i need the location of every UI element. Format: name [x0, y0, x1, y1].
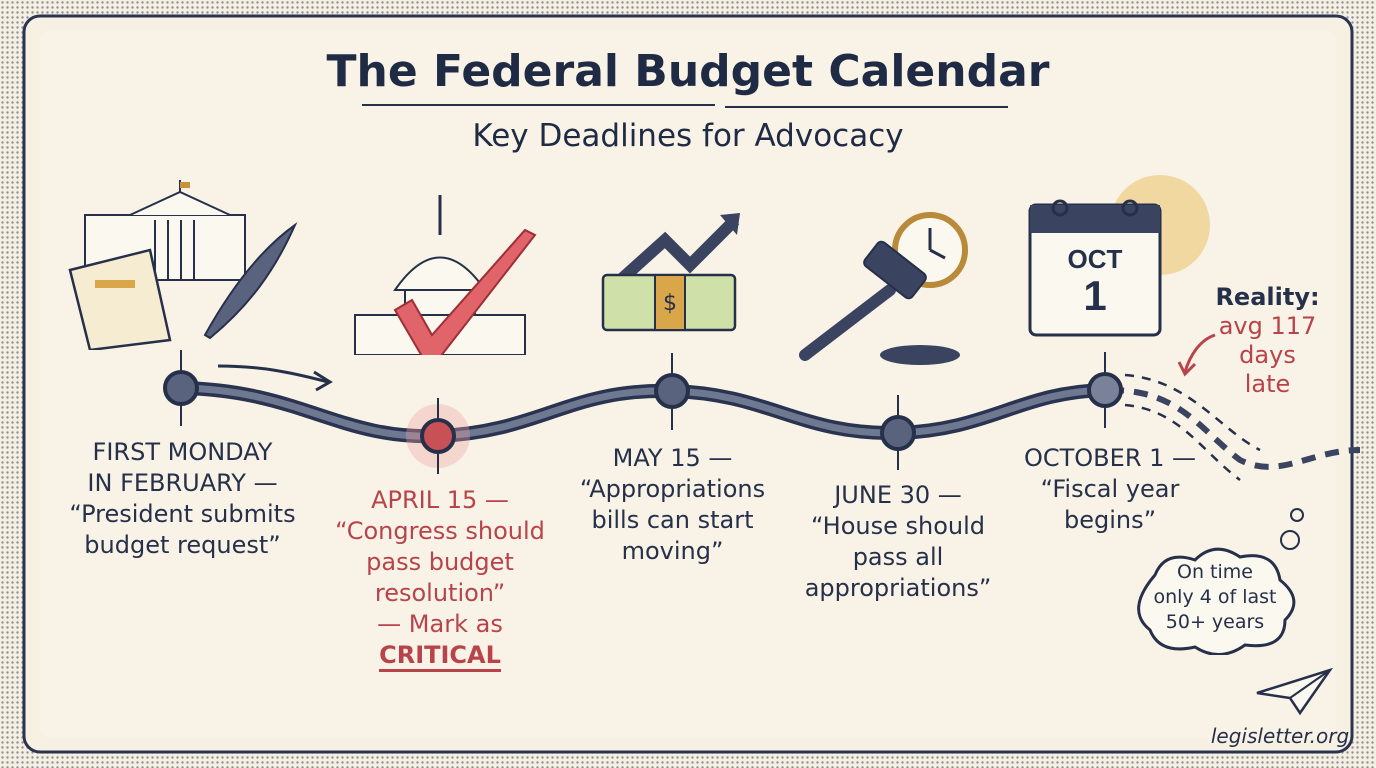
- text: october 1: [1024, 444, 1196, 534]
- text: june 30: JUNE 30 —: [834, 481, 962, 509]
- text: june 30: “House should: [811, 512, 985, 540]
- text: first monday: [69, 438, 296, 559]
- icon: calendar Oct 1 with sun: 1: [1083, 272, 1107, 319]
- icon: white house and scroll: [68, 180, 298, 350]
- text: may 15: “Appropriations: [580, 475, 765, 503]
- text: june 30: appropriations”: [805, 574, 991, 602]
- text: april 15 critical: pass budget: [366, 548, 514, 576]
- callout: cloud: only 4 of last: [1154, 586, 1276, 608]
- callout: reality: [1215, 283, 1320, 398]
- text: october 1: OCTOBER 1 —: [1024, 444, 1196, 472]
- callout: reality: late: [1245, 370, 1290, 398]
- text: first monday: budget request”: [84, 531, 281, 559]
- callout: reality: days: [1239, 341, 1296, 369]
- icon: capitol with checkmark: [354, 195, 536, 355]
- text: april 15 critical: — Mark as: [377, 610, 503, 638]
- icon: calendar Oct 1 with sun: OCT: [1068, 244, 1123, 274]
- text: june 30: pass all: [853, 543, 943, 571]
- icon: calendar Oct 1 with sun: [1028, 175, 1210, 336]
- text: first monday: IN FEBRUARY —: [87, 469, 278, 497]
- text: april 15 critical: APRIL 15 —: [371, 486, 509, 514]
- text: june 30: [805, 481, 991, 602]
- text: first monday: “President submits: [69, 500, 296, 528]
- callout: reality: Reality:: [1215, 283, 1320, 311]
- footer: url: legisletter.org: [1211, 724, 1349, 748]
- callout: reality: avg 117: [1219, 312, 1316, 340]
- icon: gavel and clock: [799, 212, 968, 365]
- text: april 15 critical: resolution”: [375, 579, 505, 607]
- text: october 1: “Fiscal year: [1041, 475, 1179, 503]
- text: april 15 critical: CRITICAL: [379, 641, 501, 669]
- callout: cloud: On time: [1177, 561, 1253, 583]
- text: may 15: MAY 15 —: [613, 444, 732, 472]
- text: may 15: moving”: [622, 537, 723, 565]
- icon: money stack with arrow: $: [663, 291, 677, 316]
- text: april 15 critical: “Congress should: [335, 517, 545, 545]
- callout: cloud: [1137, 508, 1304, 655]
- icon: paper plane: [1256, 668, 1333, 716]
- subtitle: Key Deadlines for Advocacy: [472, 118, 904, 154]
- title: The Federal Budget Calendar: [327, 46, 1049, 97]
- callout: cloud: 50+ years: [1166, 611, 1264, 633]
- text: may 15: bills can start: [591, 506, 754, 534]
- text: first monday: FIRST MONDAY: [93, 438, 272, 466]
- text: may 15: [580, 444, 765, 565]
- text: april 15 critical: [335, 486, 545, 672]
- text: october 1: begins”: [1064, 506, 1156, 534]
- arrow: reality pointer: [1178, 334, 1216, 376]
- icon: money stack with arrow: [602, 213, 740, 332]
